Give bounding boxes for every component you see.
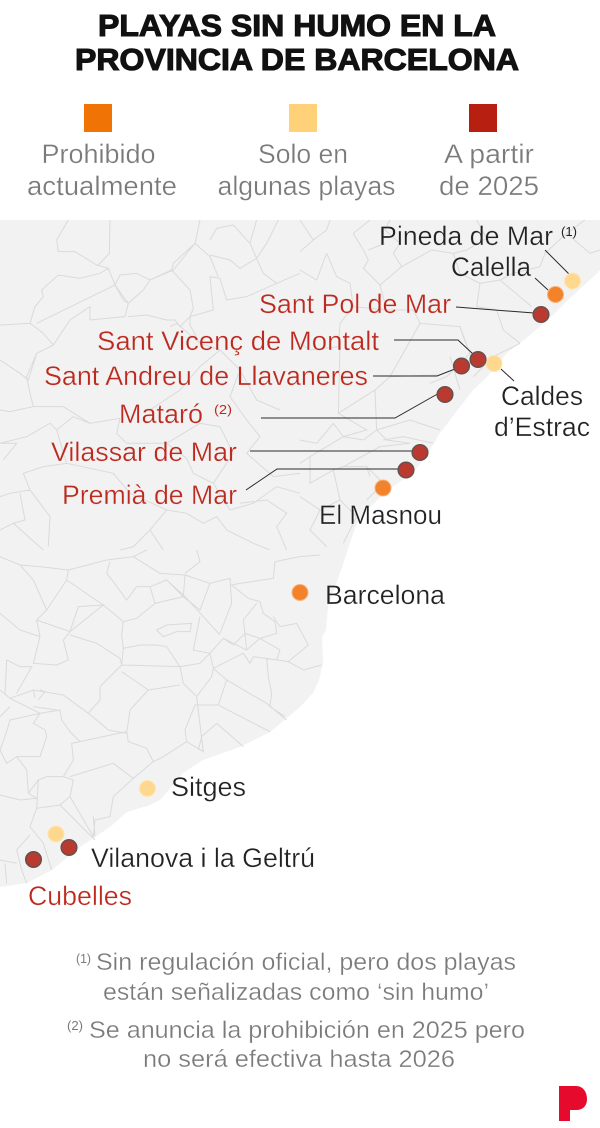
footnotes: Se anuncia la prohibición en 2025 pero bbox=[89, 1017, 525, 1044]
place labels: black: Calella bbox=[451, 252, 531, 282]
legend: solo en algunas playas: Solo en bbox=[258, 139, 348, 169]
place labels: black: Caldes bbox=[501, 381, 583, 411]
place labels: red: Cubelles bbox=[28, 881, 132, 911]
legend: a partir de 2025: A partir bbox=[444, 139, 534, 169]
logo bbox=[559, 1086, 587, 1121]
legend: solo en algunas playas: algunas playas bbox=[218, 171, 396, 201]
legend: prohibido actualmente bbox=[27, 104, 177, 201]
place labels: red: Sant Vicenç de Montalt bbox=[97, 326, 380, 356]
title: PROVINCIA DE BARCELONA bbox=[75, 42, 519, 77]
legend: a partir de 2025: de 2025 bbox=[439, 171, 539, 201]
footnotes: están señalizadas como ‘sin humo’ bbox=[103, 979, 489, 1006]
leader lines bbox=[246, 250, 569, 490]
footnotes: Sin regulación oficial, pero dos playas bbox=[96, 949, 516, 976]
title bbox=[75, 8, 519, 77]
place labels: red: Vilassar de Mar bbox=[51, 437, 237, 467]
map: province land bbox=[0, 220, 600, 887]
place labels: black: (1) bbox=[561, 224, 577, 239]
place labels: red bbox=[28, 289, 451, 911]
legend: prohibido actualmente: Prohibido bbox=[42, 139, 156, 169]
place labels: black: Sitges bbox=[171, 772, 246, 802]
place labels: black: d’Estrac bbox=[494, 412, 590, 442]
legend: prohibido actualmente: actualmente bbox=[27, 171, 177, 201]
markers: yellow, some beaches bbox=[48, 273, 580, 842]
place labels: red: Sant Pol de Mar bbox=[259, 289, 451, 319]
legend: solo en algunas playas bbox=[218, 104, 396, 201]
place labels: red: Sant Andreu de Llavaneres bbox=[44, 361, 368, 391]
place labels: black: Pineda de Mar bbox=[379, 221, 553, 251]
footnotes: (1) bbox=[76, 951, 91, 966]
legend: a partir de 2025 bbox=[439, 104, 539, 201]
title: PLAYAS SIN HUMO EN LA bbox=[98, 8, 496, 43]
footnotes: no será efectiva hasta 2026 bbox=[143, 1046, 455, 1073]
place labels: red: Premià de Mar bbox=[62, 480, 237, 510]
place labels: black: Vilanova i la Geltrú bbox=[91, 843, 315, 873]
footnotes bbox=[67, 949, 525, 1073]
map: municipal boundaries bbox=[0, 220, 600, 883]
place labels: red: (2) bbox=[214, 402, 232, 417]
place labels: red: Mataró bbox=[119, 399, 203, 429]
legend bbox=[27, 104, 539, 201]
markers: red, from 2025 bbox=[26, 307, 549, 867]
place labels: black: Barcelona bbox=[325, 580, 445, 610]
place labels: black: El Masnou bbox=[319, 500, 442, 530]
footnotes: (2) bbox=[67, 1018, 83, 1033]
markers: orange, prohibited now bbox=[292, 286, 564, 600]
place labels: black bbox=[91, 221, 590, 873]
